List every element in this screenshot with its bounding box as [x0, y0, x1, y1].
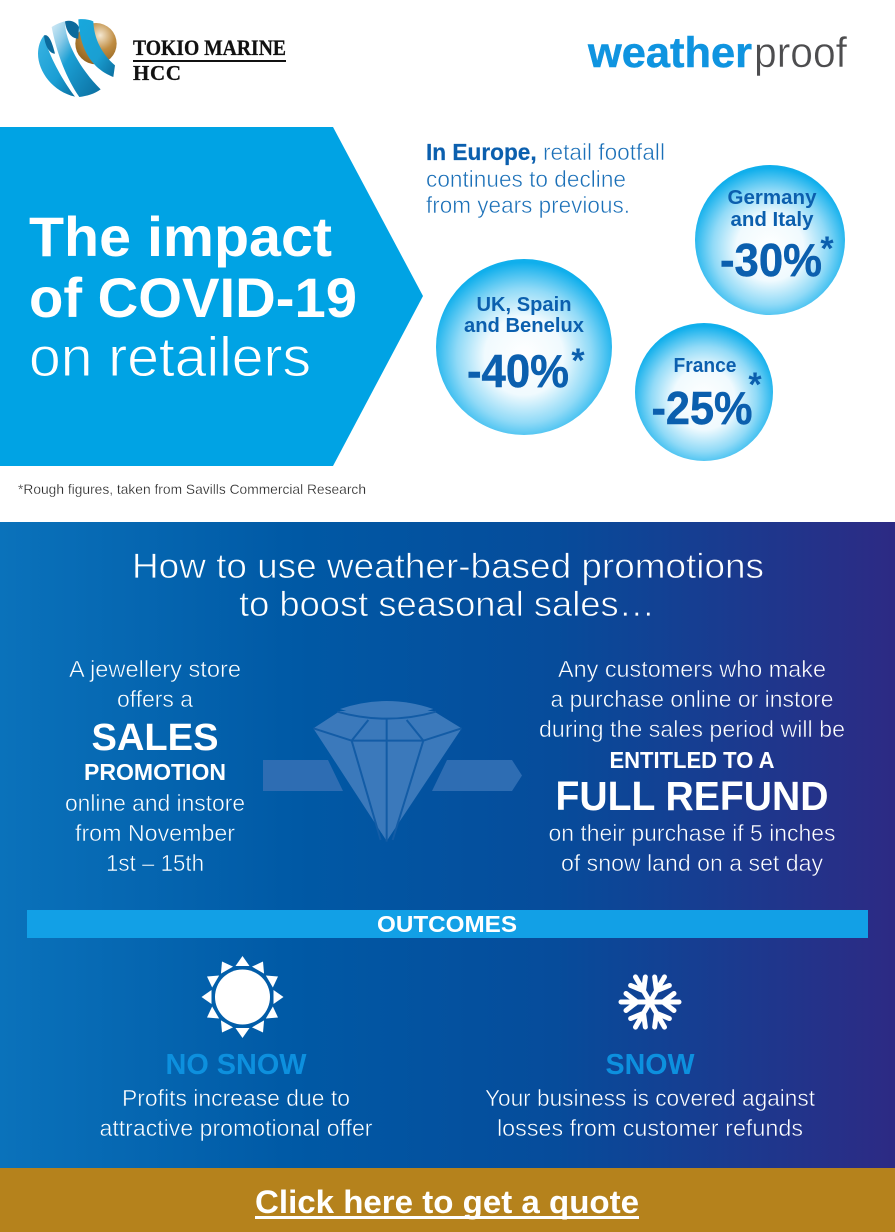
- text block: sales promotion: 1st – 15th: [106, 850, 204, 876]
- title: on retailers: [29, 325, 311, 388]
- logo: weatherproof: proof: [754, 29, 848, 77]
- text block: full refund: a purchase online or instore: [550, 686, 834, 712]
- outcome: snow: Your business is covered against: [485, 1085, 816, 1111]
- text block: sales promotion: online and instore: [65, 790, 245, 816]
- text block: sales promotion: from November: [75, 820, 235, 846]
- heading: to boost seasonal sales…: [239, 585, 655, 624]
- title: The impact: [29, 205, 332, 268]
- text block: Europe intro: In Europe, retail footfall: [426, 139, 665, 165]
- outcome: snow: losses from customer refunds: [497, 1115, 803, 1141]
- panel: title chevron: [0, 127, 423, 466]
- text block: full refund: [539, 656, 845, 876]
- text block: Europe intro: from years previous.: [426, 192, 630, 218]
- bubble: UK, Spain and Benelux: -40%: [467, 345, 569, 397]
- bubble: UK, Spain and Benelux: *: [571, 342, 585, 380]
- text block: full refund: on their purchase if 5 inches: [548, 820, 836, 846]
- text block: sales promotion: PROMOTION: [84, 759, 226, 785]
- bubble: France: -25%: [652, 382, 752, 434]
- outcome: snow: SNOW: [606, 1049, 695, 1081]
- text block: sales promotion: [65, 656, 245, 876]
- bubble: UK, Spain and Benelux: UK, Spain: [476, 294, 572, 316]
- call to action bar: Click here to get a quote: [255, 1184, 639, 1220]
- icon: Tokio Marine globe: [38, 19, 117, 97]
- outcome: no snow: attractive promotional offer: [100, 1115, 373, 1141]
- footnote: *Rough figures, taken from Savills Commercial Research: [18, 481, 366, 497]
- bubble: France: France: [674, 355, 736, 377]
- text block: sales promotion: offers a: [117, 686, 193, 712]
- icon: diamond ring: [263, 701, 522, 842]
- outcomes bar: OUTCOMES: [377, 911, 517, 937]
- bubble: Germany and Italy: [695, 165, 845, 315]
- logo: Tokio Marine HCC: [38, 19, 286, 97]
- logo: weatherproof: weather: [587, 29, 752, 77]
- heading: [132, 547, 764, 624]
- bubble: France: [635, 323, 773, 461]
- outcome: snow: [485, 1049, 816, 1141]
- text block: full refund: of snow land on a set day: [561, 850, 823, 876]
- wordmark: Tokio Marine: TOKIO MARINE: [133, 35, 286, 60]
- icon: snowflake: [610, 962, 690, 1042]
- text block: Europe intro: [426, 139, 665, 218]
- call to action bar: [0, 1168, 895, 1232]
- text block: full refund: ENTITLED TO A: [610, 747, 774, 773]
- title: [29, 205, 357, 388]
- outcome: no snow: [100, 1049, 373, 1141]
- bubble: Germany and Italy: *: [820, 230, 834, 268]
- text block: Europe intro: continues to decline: [426, 166, 626, 192]
- bubble: France: *: [748, 366, 762, 404]
- outcomes bar: [27, 910, 868, 938]
- panel: weather-based promotions: [0, 522, 895, 1168]
- outcome: no snow: NO SNOW: [166, 1049, 307, 1081]
- logo: weatherproof: [587, 29, 848, 77]
- text block: full refund: during the sales period will be: [539, 716, 845, 742]
- text block: full refund: Any customers who make: [558, 656, 826, 682]
- text block: sales promotion: A jewellery store: [69, 656, 241, 682]
- wordmark: HCC: HCC: [133, 61, 181, 85]
- heading: How to use weather-based promotions: [132, 547, 764, 586]
- bubble: Germany and Italy: Germany: [728, 187, 817, 209]
- title: of COVID-19: [29, 266, 357, 329]
- bubble: UK, Spain and Benelux: [436, 259, 612, 435]
- text block: sales promotion: SALES: [92, 717, 218, 759]
- bubble: Germany and Italy: -30%: [720, 234, 822, 286]
- outcome: no snow: Profits increase due to: [122, 1085, 350, 1111]
- icon: sun: [202, 956, 284, 1038]
- bubble: UK, Spain and Benelux: and Benelux: [464, 315, 584, 337]
- text block: full refund: FULL REFUND: [556, 773, 828, 819]
- bubble: Germany and Italy: and Italy: [730, 209, 814, 231]
